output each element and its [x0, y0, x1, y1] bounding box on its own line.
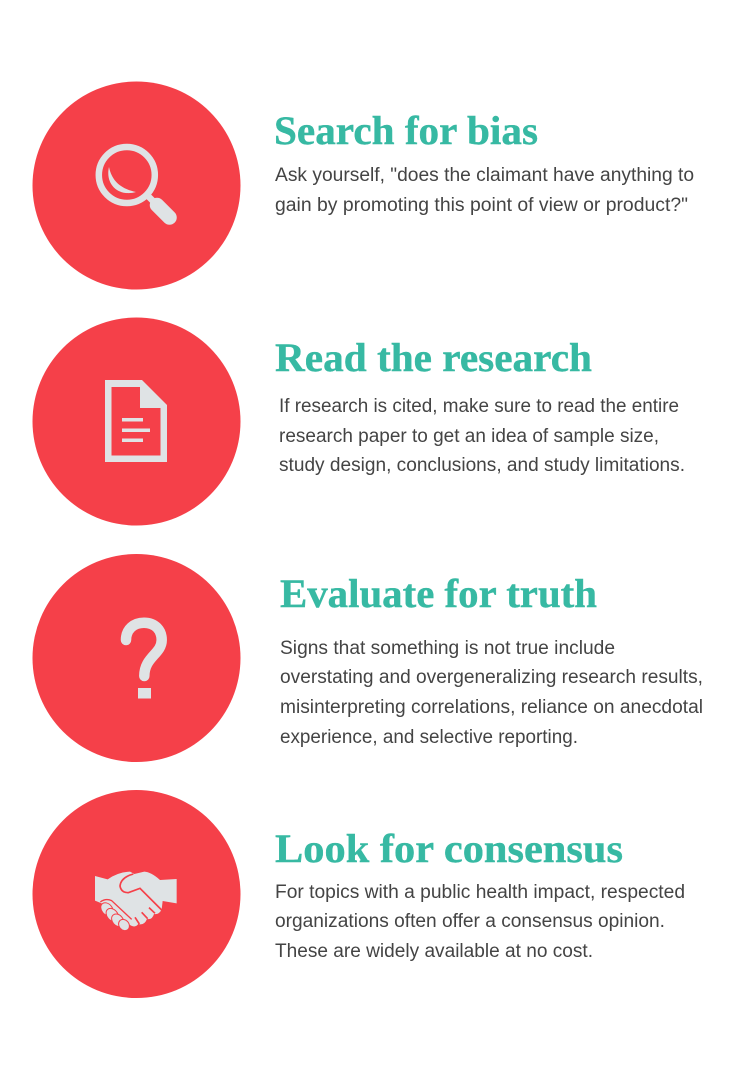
body text: overstating and overgeneralizing research results, — [280, 667, 703, 688]
heading: Search for bias — [274, 108, 538, 153]
icon: magnifying glass — [99, 147, 170, 218]
panel: read the research — [32, 318, 685, 526]
body text: experience, and selective reporting. — [280, 727, 578, 748]
body text: organizations often offer a consensus opinion. — [275, 911, 665, 932]
body text — [275, 165, 694, 216]
body text: misinterpreting correlations, reliance on anecdotal — [280, 697, 703, 718]
body text — [275, 882, 685, 962]
body text: Ask yourself, "does the claimant have anything to — [275, 165, 694, 186]
body text: research paper to get an idea of sample size, — [279, 426, 659, 447]
heading: Read the research — [275, 335, 592, 380]
heading: Look for consensus — [275, 826, 623, 871]
red circle — [32, 318, 240, 526]
body text: If research is cited, make sure to read the entire — [279, 396, 679, 417]
red circle — [32, 82, 240, 290]
red circle — [32, 554, 240, 762]
body text: These are widely available at no cost. — [275, 941, 593, 962]
panel: evaluate for truth — [32, 554, 703, 762]
icon: handshake — [95, 872, 177, 933]
body text: study design, conclusions, and study limitations. — [279, 455, 685, 476]
body text: gain by promoting this point of view or product?" — [275, 195, 688, 216]
icon: document — [105, 380, 167, 462]
panel: search for bias — [32, 82, 694, 290]
red circle — [32, 790, 240, 998]
icon: question mark — [126, 623, 162, 698]
body text — [279, 396, 685, 476]
body text — [280, 638, 703, 748]
body text: Signs that something is not true include — [280, 638, 615, 659]
heading: Evaluate for truth — [280, 571, 597, 616]
panel: look for consensus — [32, 790, 685, 998]
body text: For topics with a public health impact, respected — [275, 882, 685, 903]
